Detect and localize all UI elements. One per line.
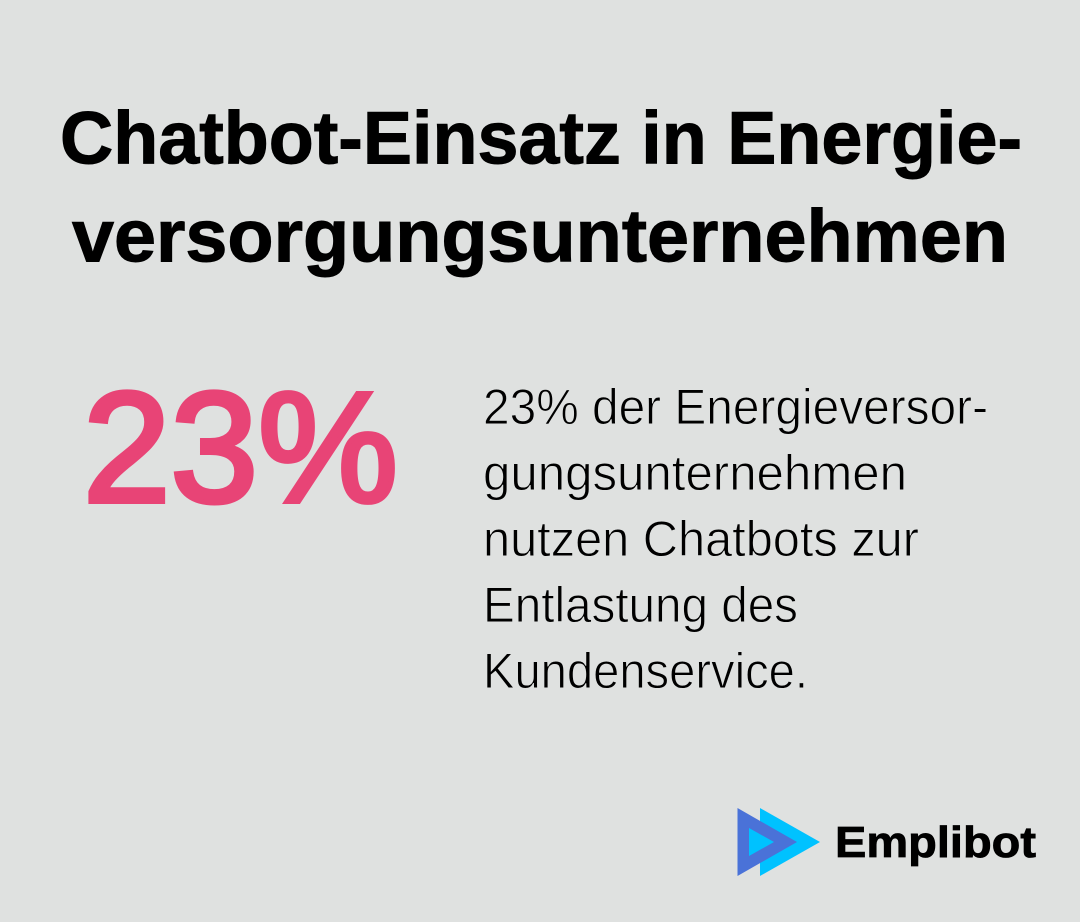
title: Chatbot-Einsatz in Energie- bbox=[60, 96, 1022, 180]
description text: Entlastung des bbox=[483, 577, 798, 633]
description text: gungsunternehmen bbox=[483, 445, 907, 501]
description text: 23% der Energieversor- bbox=[483, 379, 988, 435]
description text: Kundenservice. bbox=[483, 643, 808, 699]
title bbox=[60, 96, 1022, 278]
icon: play triangles bbox=[738, 808, 820, 876]
big statistic: 23%: 23% bbox=[83, 360, 398, 536]
logo: Emplibot bbox=[738, 808, 1036, 876]
title: versorgungsunternehmen bbox=[72, 194, 1008, 278]
description text: nutzen Chatbots zur bbox=[483, 511, 919, 567]
wordmark: Emplibot bbox=[835, 818, 1036, 867]
description text bbox=[483, 379, 988, 699]
